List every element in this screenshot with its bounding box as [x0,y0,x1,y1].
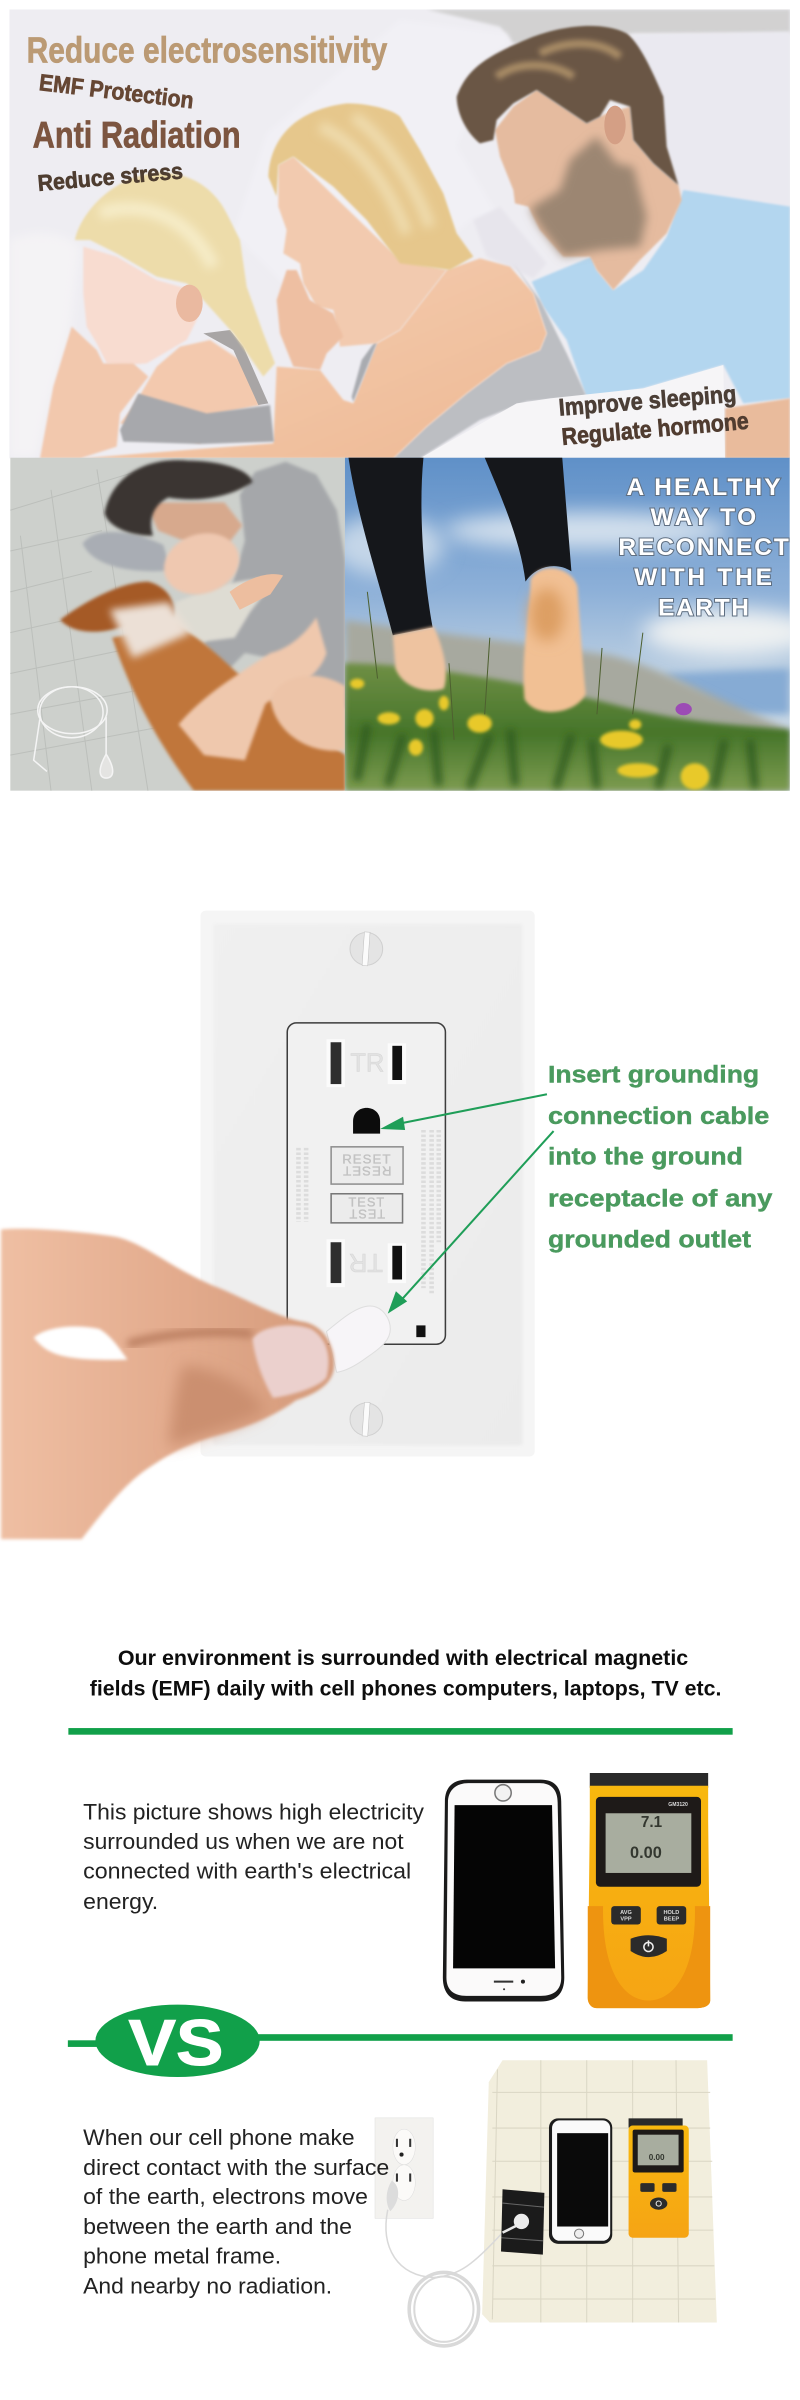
arm and hand [179,617,327,760]
wall plate [201,911,535,1457]
icon: EMF meter [588,1773,710,2008]
heading: EMF environment: Our environment is surrounded with electrical magnetic [118,1646,688,1670]
dog [60,582,345,791]
outlet receptacle: TR [349,1248,383,1276]
outlet receptacle: TR [350,1049,384,1077]
baby [162,532,283,643]
text: cell phone grounded: When our cell phone make [83,2125,355,2150]
icon: EMF meter: 0.00 [630,1844,662,1862]
text: high electricity: surrounded us when we are not [83,1829,404,1854]
text: insert grounding instructions [548,1062,773,1253]
test button: TEST [348,1207,385,1222]
grounding sheet [482,2060,717,2322]
icon: coiled cable [386,2210,503,2346]
sweater [204,462,345,709]
icon: small EMF meter on sheet [629,2118,689,2238]
icon: phone [443,1780,564,2002]
feet [393,568,586,712]
icon: bottom screw [350,1402,383,1436]
text: insert grounding instructions: receptacle of any [548,1186,773,1213]
text: Regulate hormone: Regulate hormone [560,408,750,451]
text: Anti Radiation: Anti Radiation [33,114,241,155]
text: cell phone grounded: between the earth and the [83,2214,352,2239]
section: outlet instruction [1,911,773,1539]
test button [331,1194,403,1223]
meter buttons [611,1906,686,1957]
divider with VS badge: VS [129,2006,223,2079]
text: high electricity: This picture shows high electricity [83,1799,425,1824]
icon: EMF meter: 7.1 [641,1814,663,1831]
woman [80,103,725,458]
icon: EMF meter: GM3120 [668,1802,688,1808]
section: EMF comparison [68,1646,733,2346]
girl [40,173,275,458]
icon: black snap patch [501,2189,544,2255]
divider with VS badge [68,2005,733,2079]
outlet receptacle [287,1023,445,1344]
reset button: RESET [342,1164,391,1179]
panel: family sleeping in bed [9,9,790,458]
text: A healthy way to reconnect with the earth: WITH THE [634,564,772,591]
text: insert grounding instructions: grounded outlet [548,1226,751,1253]
text: Reduce stress: Reduce stress [37,157,184,196]
test button: TEST [348,1195,385,1210]
hand holding white plug [1,1229,390,1539]
text: cell phone grounded: of the earth, electrons move [83,2184,368,2209]
text: A healthy way to reconnect with the earth: WAY TO [651,504,756,531]
text: insert grounding instructions: Insert grounding [548,1062,759,1089]
flowers and grass [350,679,709,790]
text: cell phone grounded [83,2125,389,2298]
text: A healthy way to reconnect with the earth: RECONNECT [618,534,789,561]
text: insert grounding instructions: into the ground [548,1144,743,1171]
text: insert grounding instructions: connection cable [548,1103,769,1130]
panel: mother baby and dog on grounding sheet [10,458,345,791]
text: cell phone grounded: And nearby no radiation. [83,2273,332,2298]
icon: ground hole [353,1108,380,1134]
heading: EMF environment [90,1646,721,1700]
meter buttons: BEEP [664,1916,679,1922]
text: high electricity: energy. [83,1889,158,1914]
text: cell phone grounded: direct contact with the surface [83,2155,389,2180]
meter buttons: AVG [620,1910,633,1916]
icon: white grounding cable [34,687,113,778]
section: photo collage [9,9,800,791]
arrow: to plug [388,1131,554,1314]
text: Reduce electrosensitivity: Reduce electrosensitivity [27,30,387,71]
text: high electricity: connected with earth's electrical [83,1859,411,1884]
grass blades [357,724,755,788]
reset button: RESET [342,1152,391,1167]
text: cell phone grounded: phone metal frame. [83,2243,281,2268]
legs [348,458,571,635]
panel: barefoot walking on grass [332,458,800,791]
text: A healthy way to reconnect with the earth: A HEALTHY [627,474,781,501]
icon: small phone on sheet [549,2118,612,2244]
icon: wall outlet with plug [375,2118,433,2218]
heading: EMF environment: fields (EMF) daily with cell phones computers, laptops, TV etc. [90,1676,721,1700]
text: EMF Protection: EMF Protection [38,69,195,113]
reset button [331,1147,403,1184]
man [457,26,790,458]
meter buttons: HOLD [663,1910,679,1916]
text: A healthy way to reconnect with the earth [618,474,789,621]
icon: small EMF meter on sheet: 0.00 [649,2153,665,2162]
icon: top screw [350,932,383,966]
pillow [83,532,171,571]
text: A healthy way to reconnect with the earth: EARTH [658,594,749,621]
woman face and hair [105,460,253,548]
text: high electricity [83,1799,425,1914]
text: Improve sleeping: Improve sleeping [558,381,737,422]
meter buttons: VPP [620,1916,632,1922]
arrow: to ground hole [380,1094,547,1130]
